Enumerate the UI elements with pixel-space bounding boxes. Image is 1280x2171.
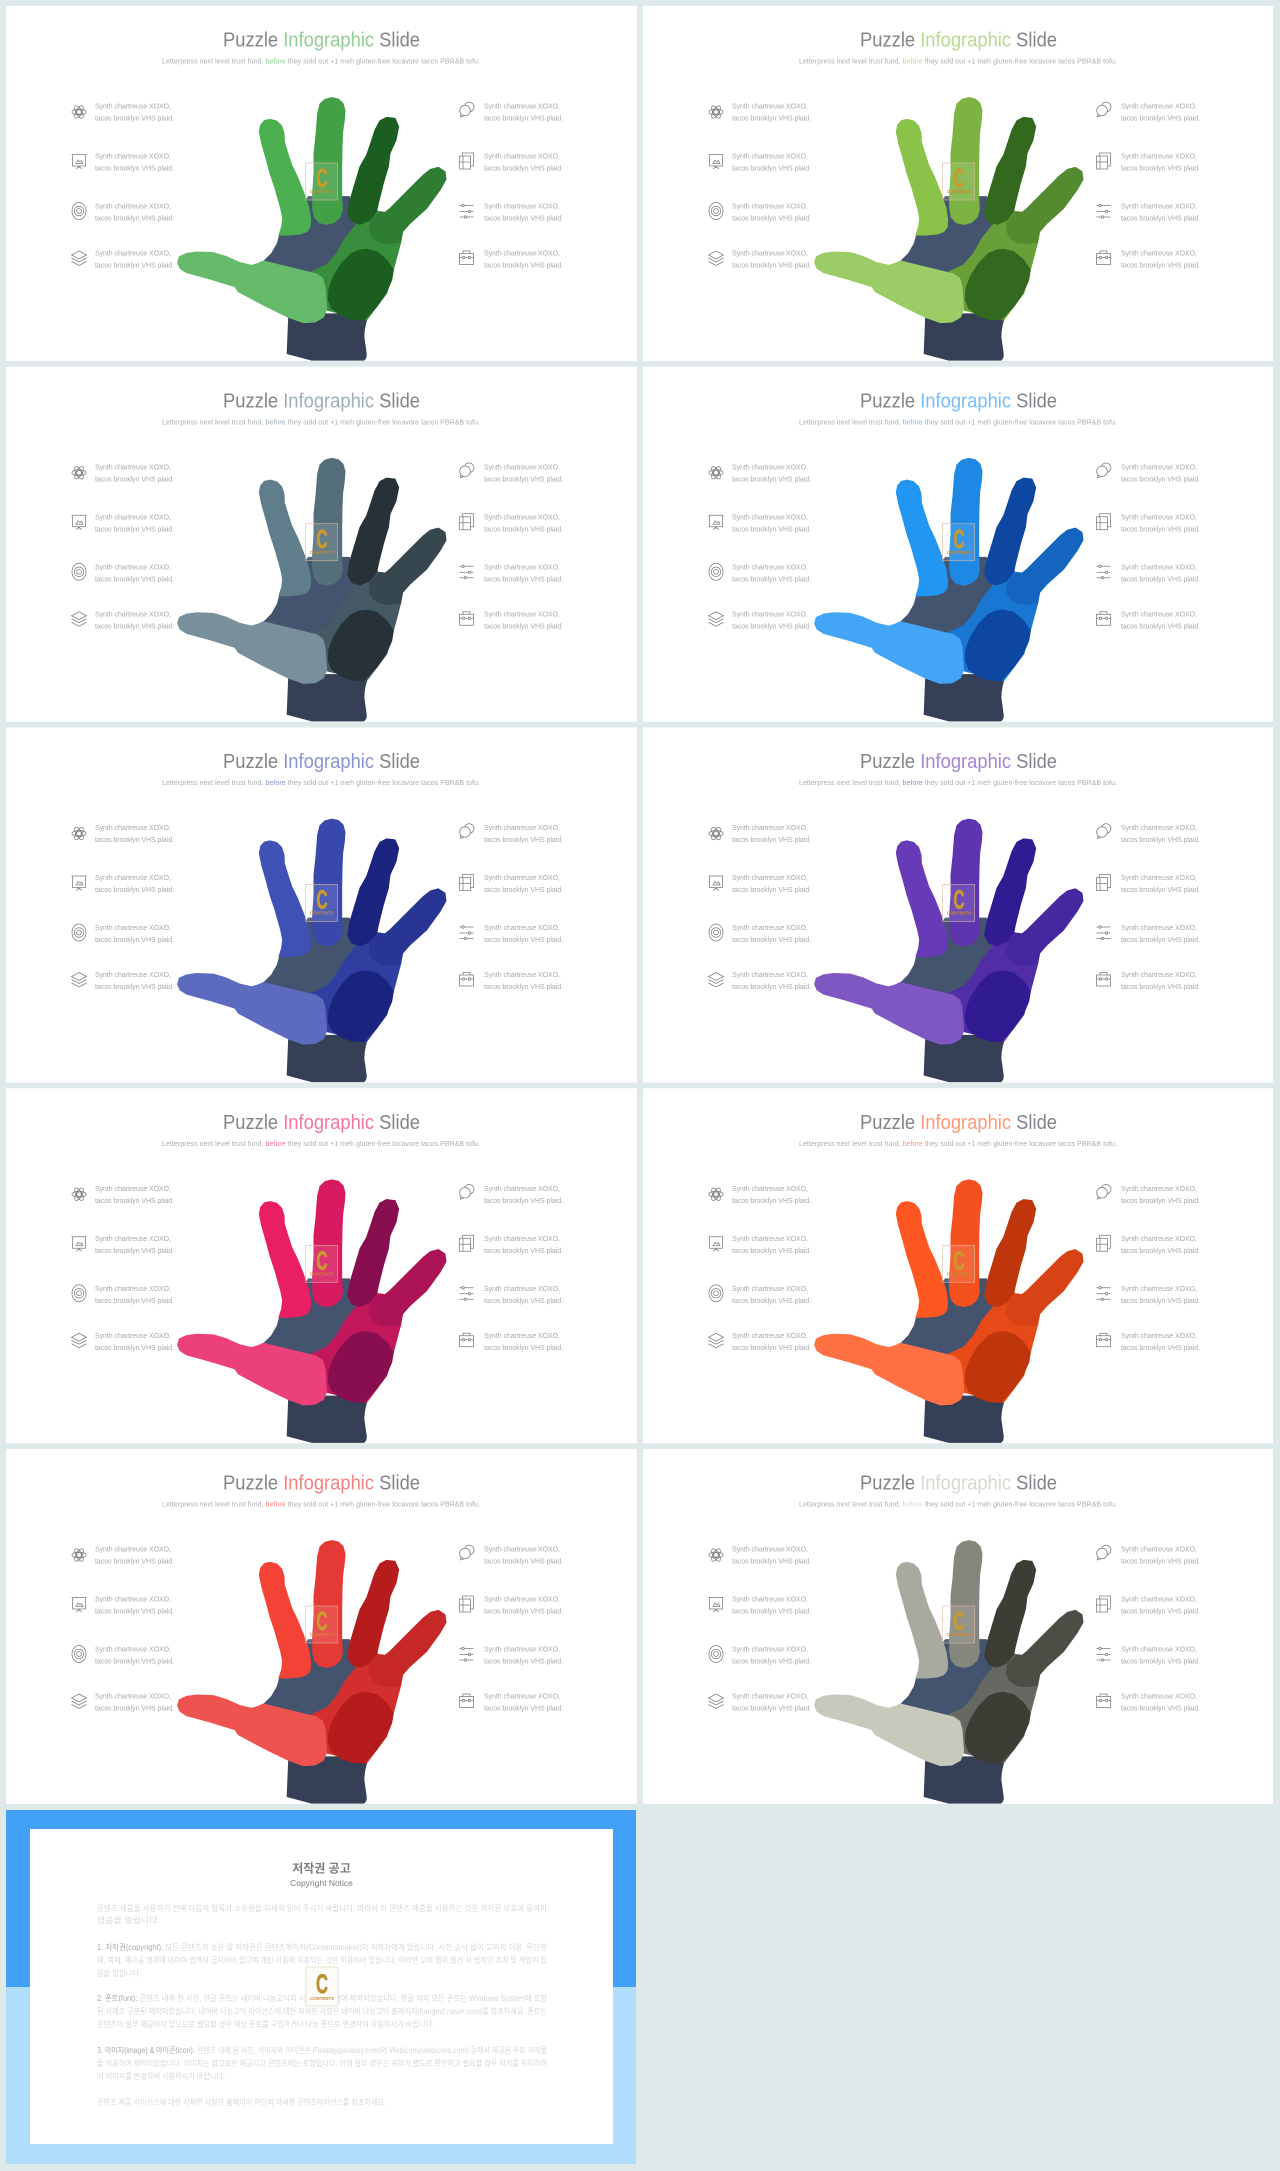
body text: 이 이미지를 변경하여 사용하시기 바랍니다. — [97, 2071, 225, 2081]
right items: Synth chartreuse XOXO, — [484, 611, 560, 618]
right items: Synth chartreuse XOXO, — [484, 104, 560, 110]
left items: tacos brooklyn VHS plaid. — [95, 262, 174, 270]
right items: tacos brooklyn VHS plaid. — [484, 1298, 563, 1305]
left items: Synth chartreuse XOXO, — [732, 514, 808, 521]
hand — [815, 819, 1083, 1082]
title: Puzzle Infographic Slide — [860, 1472, 1057, 1494]
subtitle: Letterpress next level trust fund, before they sold out +1 meh gluten-free locavore tacos PBR&B tofu. — [162, 780, 480, 787]
watermark: CONTENTS — [310, 1996, 334, 2001]
hand — [815, 458, 1083, 721]
watermark — [942, 163, 974, 200]
left items: tacos brooklyn VHS plaid. — [732, 984, 811, 991]
left items: Synth chartreuse XOXO, — [732, 1646, 808, 1654]
subtitle: Letterpress next level trust fund, before they sold out +1 meh gluten-free locavore tacos PBR&B tofu. — [162, 1502, 480, 1508]
left items — [708, 825, 811, 991]
right items: Synth chartreuse XOXO, — [484, 464, 560, 471]
right items: Synth chartreuse XOXO, — [1121, 154, 1197, 160]
right items: tacos brooklyn VHS plaid. — [1121, 1248, 1200, 1255]
left items: tacos brooklyn VHS plaid. — [95, 526, 174, 533]
right items: tacos brooklyn VHS plaid. — [1121, 1706, 1200, 1712]
left items — [708, 104, 811, 270]
panel: deep orange hand slide — [643, 1088, 1273, 1443]
right items: tacos brooklyn VHS plaid. — [1121, 1608, 1200, 1616]
left items — [72, 464, 174, 630]
panel: light green hand slide — [643, 6, 1273, 361]
left items: Synth chartreuse XOXO, — [95, 464, 171, 471]
right items: tacos brooklyn VHS plaid. — [484, 1345, 563, 1352]
right items: Synth chartreuse XOXO, — [484, 1236, 560, 1243]
right items: Synth chartreuse XOXO, — [1121, 250, 1197, 258]
left items: tacos brooklyn VHS plaid. — [732, 1706, 811, 1712]
title: Puzzle Infographic Slide — [223, 30, 420, 52]
left items: tacos brooklyn VHS plaid. — [95, 984, 174, 991]
right items: Synth chartreuse XOXO, — [484, 1286, 560, 1293]
left items: tacos brooklyn VHS plaid. — [95, 887, 174, 894]
left items — [708, 1546, 811, 1712]
right items — [460, 824, 563, 991]
right items: tacos brooklyn VHS plaid. — [484, 984, 563, 991]
right items: Synth chartreuse XOXO, — [1121, 1286, 1197, 1293]
right items: Synth chartreuse XOXO, — [1121, 1596, 1197, 1604]
left items: Synth chartreuse XOXO, — [732, 1333, 808, 1340]
right items: tacos brooklyn VHS plaid. — [1121, 837, 1200, 844]
left items — [72, 104, 174, 270]
left items: tacos brooklyn VHS plaid. — [732, 576, 811, 583]
body text: 1. 저작권(copyright): 모든 콘텐츠의 소유 및 저작권은 콘텐츠메이커(Contentsmaker)의 저작자에게 있습니다. 사전 승낙 없이 고의적 이용, 무단전 — [97, 1942, 547, 1952]
hand — [815, 1541, 1083, 1804]
right items: Synth chartreuse XOXO, — [1121, 875, 1197, 882]
right items: Synth chartreuse XOXO, — [1121, 1236, 1197, 1243]
left items: tacos brooklyn VHS plaid. — [732, 262, 811, 270]
body text: 재, 복제, 재가공 행위에 대하여 엄격히 금지되어 있으며 개인 사용에 이용되는 것만 허용되어 있습니다. 이러한 고의 행위 발견 시 법적인 조치 및 책임이 있 — [97, 1955, 547, 1965]
left items: tacos brooklyn VHS plaid. — [732, 1198, 811, 1205]
left items: tacos brooklyn VHS plaid. — [732, 116, 811, 122]
right items: Synth chartreuse XOXO, — [1121, 564, 1197, 571]
left items: Synth chartreuse XOXO, — [95, 1646, 171, 1654]
subtitle: Letterpress next level trust fund, before they sold out +1 meh gluten-free locavore tacos PBR&B tofu. — [799, 1502, 1117, 1508]
left items: tacos brooklyn VHS plaid. — [95, 937, 174, 944]
left items: tacos brooklyn VHS plaid. — [732, 623, 811, 630]
title: Puzzle Infographic Slide — [223, 390, 420, 412]
left items: Synth chartreuse XOXO, — [95, 825, 171, 832]
right items: tacos brooklyn VHS plaid. — [1121, 526, 1200, 533]
right items: tacos brooklyn VHS plaid. — [1121, 1658, 1200, 1666]
right items: Synth chartreuse XOXO, — [484, 1646, 560, 1654]
left items: tacos brooklyn VHS plaid. — [732, 837, 811, 844]
right items: tacos brooklyn VHS plaid. — [484, 526, 563, 533]
right items — [1096, 102, 1200, 270]
right items: tacos brooklyn VHS plaid. — [1121, 887, 1200, 894]
subheading: Copyright Notice — [290, 1878, 353, 1888]
hand — [178, 458, 446, 721]
left items: Synth chartreuse XOXO, — [732, 875, 808, 882]
right items — [460, 102, 563, 270]
right items: Synth chartreuse XOXO, — [1121, 925, 1197, 932]
body text: 콘텐츠 제품 라이선스에 대한 사세한 사항은 홈페이지 하단의 자세한 콘텐츠라이선스를 참조하세요. — [97, 2097, 386, 2107]
hand — [178, 98, 446, 361]
left items: tacos brooklyn VHS plaid. — [95, 1558, 174, 1566]
watermark — [942, 1245, 974, 1282]
left items: Synth chartreuse XOXO, — [732, 104, 808, 110]
right items: tacos brooklyn VHS plaid. — [1121, 576, 1200, 583]
right items: tacos brooklyn VHS plaid. — [484, 262, 563, 270]
right items: Synth chartreuse XOXO, — [484, 514, 560, 521]
right items: Synth chartreuse XOXO, — [484, 972, 560, 979]
right items: tacos brooklyn VHS plaid. — [484, 1558, 563, 1566]
left items — [72, 1546, 174, 1712]
right items: Synth chartreuse XOXO, — [1121, 825, 1197, 832]
title: Puzzle Infographic Slide — [860, 751, 1057, 773]
left items: Synth chartreuse XOXO, — [732, 1546, 808, 1554]
right items: tacos brooklyn VHS plaid. — [484, 216, 563, 222]
right items: Synth chartreuse XOXO, — [484, 925, 560, 932]
left items: Synth chartreuse XOXO, — [732, 1694, 808, 1700]
left items: tacos brooklyn VHS plaid. — [732, 216, 811, 222]
watermark — [942, 524, 974, 561]
watermark — [306, 163, 338, 200]
left items: tacos brooklyn VHS plaid. — [732, 1558, 811, 1566]
left items: Synth chartreuse XOXO, — [732, 611, 808, 618]
right items: tacos brooklyn VHS plaid. — [484, 1248, 563, 1255]
left items: Synth chartreuse XOXO, — [95, 564, 171, 571]
left items: Synth chartreuse XOXO, — [95, 204, 171, 210]
right items — [1096, 1545, 1200, 1712]
right items — [1096, 1184, 1200, 1352]
right items: tacos brooklyn VHS plaid. — [1121, 216, 1200, 222]
left items — [72, 1186, 174, 1352]
panel: neutral grey hand slide — [643, 1449, 1273, 1804]
watermark: C — [316, 1969, 328, 1999]
left items — [708, 464, 811, 630]
right items: tacos brooklyn VHS plaid. — [1121, 1298, 1200, 1305]
right items: tacos brooklyn VHS plaid. — [1121, 116, 1200, 122]
title: Puzzle Infographic Slide — [223, 1112, 420, 1134]
right items: tacos brooklyn VHS plaid. — [1121, 1558, 1200, 1566]
subtitle: Letterpress next level trust fund, before they sold out +1 meh gluten-free locavore tacos PBR&B tofu. — [799, 1141, 1117, 1148]
left items: tacos brooklyn VHS plaid. — [95, 1706, 174, 1712]
right items: Synth chartreuse XOXO, — [1121, 1646, 1197, 1654]
left items — [708, 1186, 811, 1352]
right items — [460, 1545, 563, 1712]
left items: Synth chartreuse XOXO, — [732, 564, 808, 571]
left items: Synth chartreuse XOXO, — [95, 1546, 171, 1554]
panel: blue grey hand slide — [6, 367, 637, 722]
right items: tacos brooklyn VHS plaid. — [484, 937, 563, 944]
watermark — [942, 1606, 974, 1643]
hand — [815, 98, 1083, 361]
right items: Synth chartreuse XOXO, — [1121, 611, 1197, 618]
left items: Synth chartreuse XOXO, — [95, 104, 171, 110]
left items: Synth chartreuse XOXO, — [732, 464, 808, 471]
hand — [178, 1180, 446, 1443]
body text: 3. 이미지(image) & 아이콘(icon): 콘텐츠 내에 된 사진, 이미지와 아이콘은 Pixabay(pixabay.com)와 Webicons(webicons.com) 등에서 제공된 무료 저작물 — [97, 2045, 547, 2055]
right items: tacos brooklyn VHS plaid. — [1121, 476, 1200, 483]
left items: tacos brooklyn VHS plaid. — [95, 1658, 174, 1666]
body text: 된 서체로 구분된 제작되었습니다. 네이버 나눔고딕 라이선스에 대한 자세한 사항은 네이버 나눔고딕 홈페이지(hangeul.naver.com)를 참조하세요. 폰트는 — [97, 2006, 547, 2016]
left items: Synth chartreuse XOXO, — [95, 1596, 171, 1604]
subtitle: Letterpress next level trust fund, before they sold out +1 meh gluten-free locavore tacos PBR&B tofu. — [799, 419, 1117, 426]
left items: Synth chartreuse XOXO, — [732, 204, 808, 210]
subtitle: Letterpress next level trust fund, before they sold out +1 meh gluten-free locavore tacos PBR&B tofu. — [799, 780, 1117, 787]
panel: copyright notice — [6, 1810, 636, 2164]
right items: Synth chartreuse XOXO, — [484, 1596, 560, 1604]
right items: tacos brooklyn VHS plaid. — [1121, 1198, 1200, 1205]
right items: Synth chartreuse XOXO, — [1121, 972, 1197, 979]
body text: 콘텐츠의 일부 제공되지 않으므로 필요할 경우 해당 폰트를 구입하거나 나눔 폰트로 변경하여 사용하시기 바랍니다. — [97, 2019, 434, 2029]
left items: Synth chartreuse XOXO, — [732, 1286, 808, 1293]
right items: tacos brooklyn VHS plaid. — [484, 837, 563, 844]
watermark — [306, 884, 338, 922]
left items: Synth chartreuse XOXO, — [95, 1286, 171, 1293]
left items: Synth chartreuse XOXO, — [95, 1236, 171, 1243]
left items: Synth chartreuse XOXO, — [95, 154, 171, 160]
left items: tacos brooklyn VHS plaid. — [95, 116, 174, 122]
left items: tacos brooklyn VHS plaid. — [95, 1198, 174, 1205]
body text: 음을 밝힙니다. — [97, 1968, 141, 1978]
left items: tacos brooklyn VHS plaid. — [95, 476, 174, 483]
right items: tacos brooklyn VHS plaid. — [484, 1608, 563, 1616]
title: Puzzle Infographic Slide — [860, 30, 1057, 52]
body text — [97, 1903, 548, 2107]
right items: Synth chartreuse XOXO, — [1121, 1186, 1197, 1193]
left items: tacos brooklyn VHS plaid. — [732, 1248, 811, 1255]
right items — [1096, 463, 1200, 630]
title: Puzzle Infographic Slide — [860, 1112, 1057, 1134]
right items: Synth chartreuse XOXO, — [484, 1333, 560, 1340]
left items: Synth chartreuse XOXO, — [732, 1236, 808, 1243]
left items: Synth chartreuse XOXO, — [732, 925, 808, 932]
left items: tacos brooklyn VHS plaid. — [95, 1345, 174, 1352]
left items: tacos brooklyn VHS plaid. — [95, 1298, 174, 1305]
subtitle: Letterpress next level trust fund, before they sold out +1 meh gluten-free locavore tacos PBR&B tofu. — [162, 58, 480, 66]
right items: Synth chartreuse XOXO, — [484, 250, 560, 258]
right items: tacos brooklyn VHS plaid. — [1121, 984, 1200, 991]
title: Puzzle Infographic Slide — [223, 751, 420, 773]
watermark — [306, 1245, 338, 1282]
left items: Synth chartreuse XOXO, — [732, 250, 808, 258]
right items: tacos brooklyn VHS plaid. — [1121, 623, 1200, 630]
right items — [1096, 824, 1200, 991]
left items: tacos brooklyn VHS plaid. — [732, 1298, 811, 1305]
right items: Synth chartreuse XOXO, — [1121, 104, 1197, 110]
right items: Synth chartreuse XOXO, — [484, 825, 560, 832]
left items: tacos brooklyn VHS plaid. — [732, 166, 811, 172]
right items: tacos brooklyn VHS plaid. — [1121, 1345, 1200, 1352]
right items: tacos brooklyn VHS plaid. — [484, 576, 563, 583]
right items: tacos brooklyn VHS plaid. — [1121, 166, 1200, 172]
right items: Synth chartreuse XOXO, — [1121, 464, 1197, 471]
right items: tacos brooklyn VHS plaid. — [484, 623, 563, 630]
panel: blue hand slide — [643, 367, 1273, 722]
right items: Synth chartreuse XOXO, — [1121, 1333, 1197, 1340]
left items: Synth chartreuse XOXO, — [732, 1596, 808, 1604]
right items: Synth chartreuse XOXO, — [484, 1546, 560, 1554]
left items: tacos brooklyn VHS plaid. — [732, 887, 811, 894]
right items: tacos brooklyn VHS plaid. — [484, 116, 563, 122]
left items: Synth chartreuse XOXO, — [95, 925, 171, 932]
left items: tacos brooklyn VHS plaid. — [95, 166, 174, 172]
right items: Synth chartreuse XOXO, — [484, 154, 560, 160]
right items: Synth chartreuse XOXO, — [484, 204, 560, 210]
right items: Synth chartreuse XOXO, — [484, 875, 560, 882]
left items: tacos brooklyn VHS plaid. — [732, 1658, 811, 1666]
left items: tacos brooklyn VHS plaid. — [95, 837, 174, 844]
left items: Synth chartreuse XOXO, — [95, 972, 171, 979]
right items: Synth chartreuse XOXO, — [1121, 514, 1197, 521]
left items: Synth chartreuse XOXO, — [95, 611, 171, 618]
right items: Synth chartreuse XOXO, — [484, 564, 560, 571]
right items: tacos brooklyn VHS plaid. — [484, 1658, 563, 1666]
left items: Synth chartreuse XOXO, — [732, 825, 808, 832]
right items: tacos brooklyn VHS plaid. — [484, 1198, 563, 1205]
left items: tacos brooklyn VHS plaid. — [95, 1248, 174, 1255]
hand — [815, 1180, 1083, 1443]
panel: indigo hand slide — [6, 728, 637, 1082]
left items: Synth chartreuse XOXO, — [95, 1186, 171, 1193]
panel: red hand slide — [6, 1449, 637, 1804]
right items: tacos brooklyn VHS plaid. — [484, 887, 563, 894]
right items: tacos brooklyn VHS plaid. — [1121, 262, 1200, 270]
watermark — [306, 524, 338, 561]
right items: Synth chartreuse XOXO, — [1121, 1694, 1197, 1700]
left items: tacos brooklyn VHS plaid. — [732, 1345, 811, 1352]
panel: deep purple hand slide — [643, 728, 1273, 1082]
right items: Synth chartreuse XOXO, — [484, 1186, 560, 1193]
right items: Synth chartreuse XOXO, — [1121, 204, 1197, 210]
watermark — [942, 884, 974, 922]
watermark — [306, 1606, 338, 1643]
left items: Synth chartreuse XOXO, — [95, 875, 171, 882]
left items: tacos brooklyn VHS plaid. — [95, 216, 174, 222]
left items: tacos brooklyn VHS plaid. — [732, 526, 811, 533]
left items: Synth chartreuse XOXO, — [95, 1333, 171, 1340]
subtitle: Letterpress next level trust fund, before they sold out +1 meh gluten-free locavore tacos PBR&B tofu. — [162, 1141, 480, 1148]
panel: pink hand slide — [6, 1088, 637, 1443]
panel: green hand slide — [6, 6, 637, 361]
title: Puzzle Infographic Slide — [860, 390, 1057, 412]
left items: Synth chartreuse XOXO, — [732, 154, 808, 160]
left items: tacos brooklyn VHS plaid. — [95, 1608, 174, 1616]
right items: Synth chartreuse XOXO, — [484, 1694, 560, 1700]
left items: Synth chartreuse XOXO, — [95, 1694, 171, 1700]
right items: tacos brooklyn VHS plaid. — [484, 1706, 563, 1712]
body text: 콘텐츠 제품을 사용하기 전에 다음의 항목과 소유권을 자세히 읽어 주시기 바랍니다. 따라서 이 콘텐츠 제품을 사용하는 것은 저작권 보호에 동의하 — [97, 1903, 548, 1913]
right items: tacos brooklyn VHS plaid. — [1121, 937, 1200, 944]
left items: tacos brooklyn VHS plaid. — [95, 576, 174, 583]
hand — [178, 1541, 446, 1804]
subtitle: Letterpress next level trust fund, before they sold out +1 meh gluten-free locavore tacos PBR&B tofu. — [799, 58, 1117, 66]
heading: 저작권 공고 — [292, 1860, 351, 1876]
watermark — [306, 1967, 338, 2006]
right items: Synth chartreuse XOXO, — [1121, 1546, 1197, 1554]
left items: tacos brooklyn VHS plaid. — [732, 476, 811, 483]
left items: tacos brooklyn VHS plaid. — [732, 937, 811, 944]
left items: tacos brooklyn VHS plaid. — [95, 623, 174, 630]
left items: Synth chartreuse XOXO, — [95, 250, 171, 258]
left items — [72, 825, 174, 991]
right items — [460, 463, 563, 630]
left items: Synth chartreuse XOXO, — [732, 972, 808, 979]
left items: Synth chartreuse XOXO, — [95, 514, 171, 521]
body text: 였음을 알립니다. — [97, 1915, 160, 1925]
subtitle: Letterpress next level trust fund, before they sold out +1 meh gluten-free locavore tacos PBR&B tofu. — [162, 419, 480, 426]
body text: 을 이용하여 제작되었습니다. 이미지는 참고로만 제공되고 콘텐츠에는 포함됩니다. 이에 일부 경우는 귀하가 별도로 확인하고 필요할 경우 허가를 취득하여 — [97, 2058, 547, 2068]
title: Puzzle Infographic Slide — [223, 1472, 420, 1494]
hand — [178, 819, 446, 1082]
left items: tacos brooklyn VHS plaid. — [732, 1608, 811, 1616]
left items: Synth chartreuse XOXO, — [732, 1186, 808, 1193]
right items: tacos brooklyn VHS plaid. — [484, 476, 563, 483]
right items: tacos brooklyn VHS plaid. — [484, 166, 563, 172]
right items — [460, 1184, 563, 1352]
body text: 2. 폰트(font): 콘텐츠 내에 한 사진, 한글 폰트는 네이버 나눔고딕의 서체를 사용하여 제작되었습니다. 한글 외의 모든 폰트는 Windows System에 포함 — [97, 1993, 548, 2003]
